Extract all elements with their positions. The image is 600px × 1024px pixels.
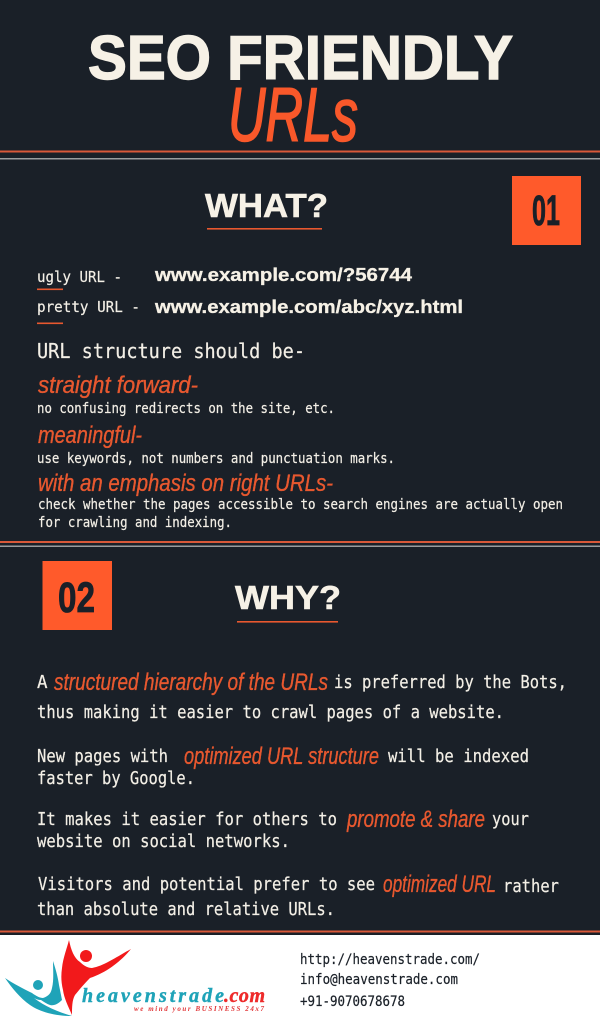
paragraph: hierarchy: is preferred by the Bots, [334, 673, 567, 693]
contact details [300, 952, 480, 1010]
logo wordmark: heavenstrade [82, 985, 224, 1007]
icon: red figure [61, 940, 131, 1015]
paragraph: sharing: your [492, 810, 529, 830]
paragraph: hierarchy: thus making it easier to crawl pages of a website. [37, 703, 504, 723]
contact details: info@heavenstrade.com [300, 972, 458, 988]
paragraph: sharing: It makes it easier for others to [37, 810, 337, 830]
pretty URL example [37, 296, 463, 324]
heading: WHAT?: WHAT? [205, 187, 328, 224]
paragraph: indexing: will be indexed [388, 747, 529, 767]
paragraph: hierarchy: A [37, 673, 48, 693]
paragraph: indexing: New pages with [37, 747, 168, 767]
ugly URL example: ugly URL - [37, 268, 122, 286]
paragraph: sharing: promote & share [346, 806, 485, 833]
contact details: http://heavenstrade.com/ [300, 952, 480, 968]
item: meaningful [37, 422, 395, 467]
paragraph: visitors: than absolute and relative URLs. [37, 900, 335, 920]
panel: what [37, 176, 581, 531]
number badge 01: 01 [532, 187, 560, 235]
paragraph: indexing [37, 743, 529, 789]
number badge 01 [512, 176, 581, 245]
item: straight forward [37, 372, 335, 417]
pretty URL example: www.example.com/abc/xyz.html [154, 296, 463, 317]
panel: why [37, 561, 567, 920]
paragraph: visitors: Visitors and potential prefer to see [38, 875, 375, 895]
logo tagline: we mind your BUSINESS 24x7 [134, 1005, 264, 1013]
ugly URL example: www.example.com/?56744 [154, 264, 413, 285]
number badge 02 [42, 561, 112, 630]
paragraph: sharing: website on social networks. [37, 832, 290, 852]
paragraph: indexing: optimized URL structure [184, 743, 379, 770]
item: meaningful: meaningful- [38, 422, 142, 449]
paragraph: visitors: rather [503, 877, 559, 897]
paragraph: visitors [37, 871, 559, 920]
item: emphasis on right URLs [38, 470, 563, 531]
icon: teal figure [5, 961, 72, 1016]
logo [5, 940, 265, 1016]
item: emphasis on right URLs: for crawling and indexing. [38, 515, 232, 531]
item: straight forward: no confusing redirects on the site, etc. [37, 401, 335, 417]
paragraph: sharing [37, 806, 529, 852]
pretty URL example: pretty URL - [37, 298, 140, 316]
number badge 02: 02 [58, 574, 95, 622]
paragraph: indexing: faster by Google. [37, 769, 195, 789]
ugly URL example [37, 264, 413, 290]
item: meaningful: use keywords, not numbers and punctuation marks. [37, 451, 395, 467]
item: straight forward: straight forward- [38, 372, 198, 399]
item: emphasis on right URLs: with an emphasis on right URLs- [38, 470, 333, 497]
title accent: URLs: URLs [228, 73, 358, 158]
title [88, 24, 513, 158]
paragraph: visitors: optimized URL [383, 871, 496, 898]
title: SEO FRIENDLY [88, 24, 513, 93]
paragraph: hierarchy [37, 669, 567, 723]
logo: .com [224, 985, 265, 1007]
footer [0, 935, 600, 1024]
subheading: URL structure should be- [37, 339, 305, 363]
heading: WHY?: WHY? [235, 579, 341, 616]
contact details: +91-9070678678 [300, 994, 405, 1010]
paragraph: hierarchy: structured hierarchy of the URLs [54, 669, 328, 696]
